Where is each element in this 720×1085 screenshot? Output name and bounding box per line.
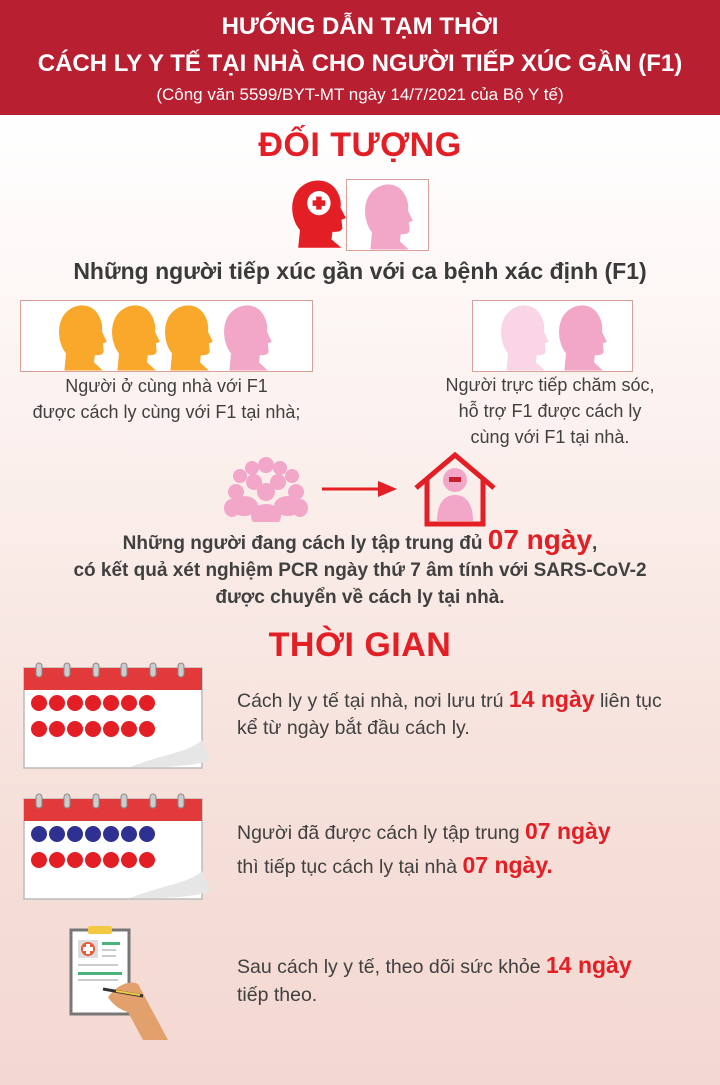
text: transfer: có kết quả xét nghiệm PCR ngày thứ 7 âm tính với SARS-CoV-2 bbox=[73, 560, 647, 581]
heading: thời gian: THỜI GIAN bbox=[269, 626, 451, 664]
text: 14 days: kể từ ngày bắt đầu cách ly. bbox=[237, 717, 470, 739]
icon: clipboard bbox=[70, 926, 168, 1040]
text: monitoring: tiếp theo. bbox=[237, 984, 317, 1006]
title: HƯỚNG DẪN TẠM THỜI bbox=[222, 13, 498, 40]
text: được cách ly cùng với F1 tại nhà; bbox=[33, 402, 300, 422]
text: cùng với F1 tại nhà. bbox=[471, 427, 629, 447]
text: Người ở cùng nhà với F1 bbox=[65, 376, 268, 396]
title: CÁCH LY Y TẾ TẠI NHÀ CHO NGƯỜI TIẾP XÚC GẦN (F1) bbox=[38, 50, 682, 77]
icon: F1 heads bbox=[292, 179, 429, 251]
text bbox=[33, 376, 300, 422]
subtitle: (Công văn 5599/BYT-MT ngày 14/7/2021 của Bộ Y tế) bbox=[156, 85, 564, 104]
icon: crowd bbox=[224, 457, 308, 522]
text: Người trực tiếp chăm sóc, bbox=[446, 375, 654, 395]
text: 7+7 days: thì tiếp tục cách ly tại nhà 07 ngày. bbox=[237, 852, 553, 878]
text: hỗ trợ F1 được cách ly bbox=[459, 401, 641, 421]
panel: caregivers bbox=[446, 300, 654, 447]
panel: household bbox=[20, 300, 313, 422]
text: transfer: được chuyển về cách ly tại nhà. bbox=[215, 587, 505, 608]
text: 14 days bbox=[237, 686, 662, 739]
header bbox=[0, 0, 720, 115]
title bbox=[38, 12, 682, 77]
text: monitoring bbox=[237, 952, 632, 1006]
text: transfer: Những người đang cách ly tập trung đủ 07 ngày, bbox=[123, 524, 597, 555]
text: 7+7 days: Người đã được cách ly tập trung 07 ngày bbox=[237, 818, 611, 844]
heading: đối tượng: ĐỐI TƯỢNG bbox=[258, 126, 462, 164]
text: monitoring: Sau cách ly y tế, theo dõi sức khỏe 14 ngày bbox=[237, 952, 632, 978]
text: 14 days: Cách ly y tế tại nhà, nơi lưu trú 14 ngày liên tục bbox=[237, 686, 662, 712]
icon: heads bbox=[472, 300, 633, 372]
icon: heads row bbox=[20, 300, 313, 372]
text: transfer bbox=[73, 524, 647, 608]
text bbox=[446, 375, 654, 447]
icon: calendar 14 days bbox=[23, 662, 210, 769]
arrow bbox=[322, 481, 397, 497]
icon: calendar 7+7 bbox=[23, 794, 210, 900]
text: 7+7 days bbox=[237, 818, 611, 878]
subheading: Những người tiếp xúc gần với ca bệnh xác định (F1) bbox=[73, 258, 647, 284]
icon: house bbox=[414, 452, 496, 526]
